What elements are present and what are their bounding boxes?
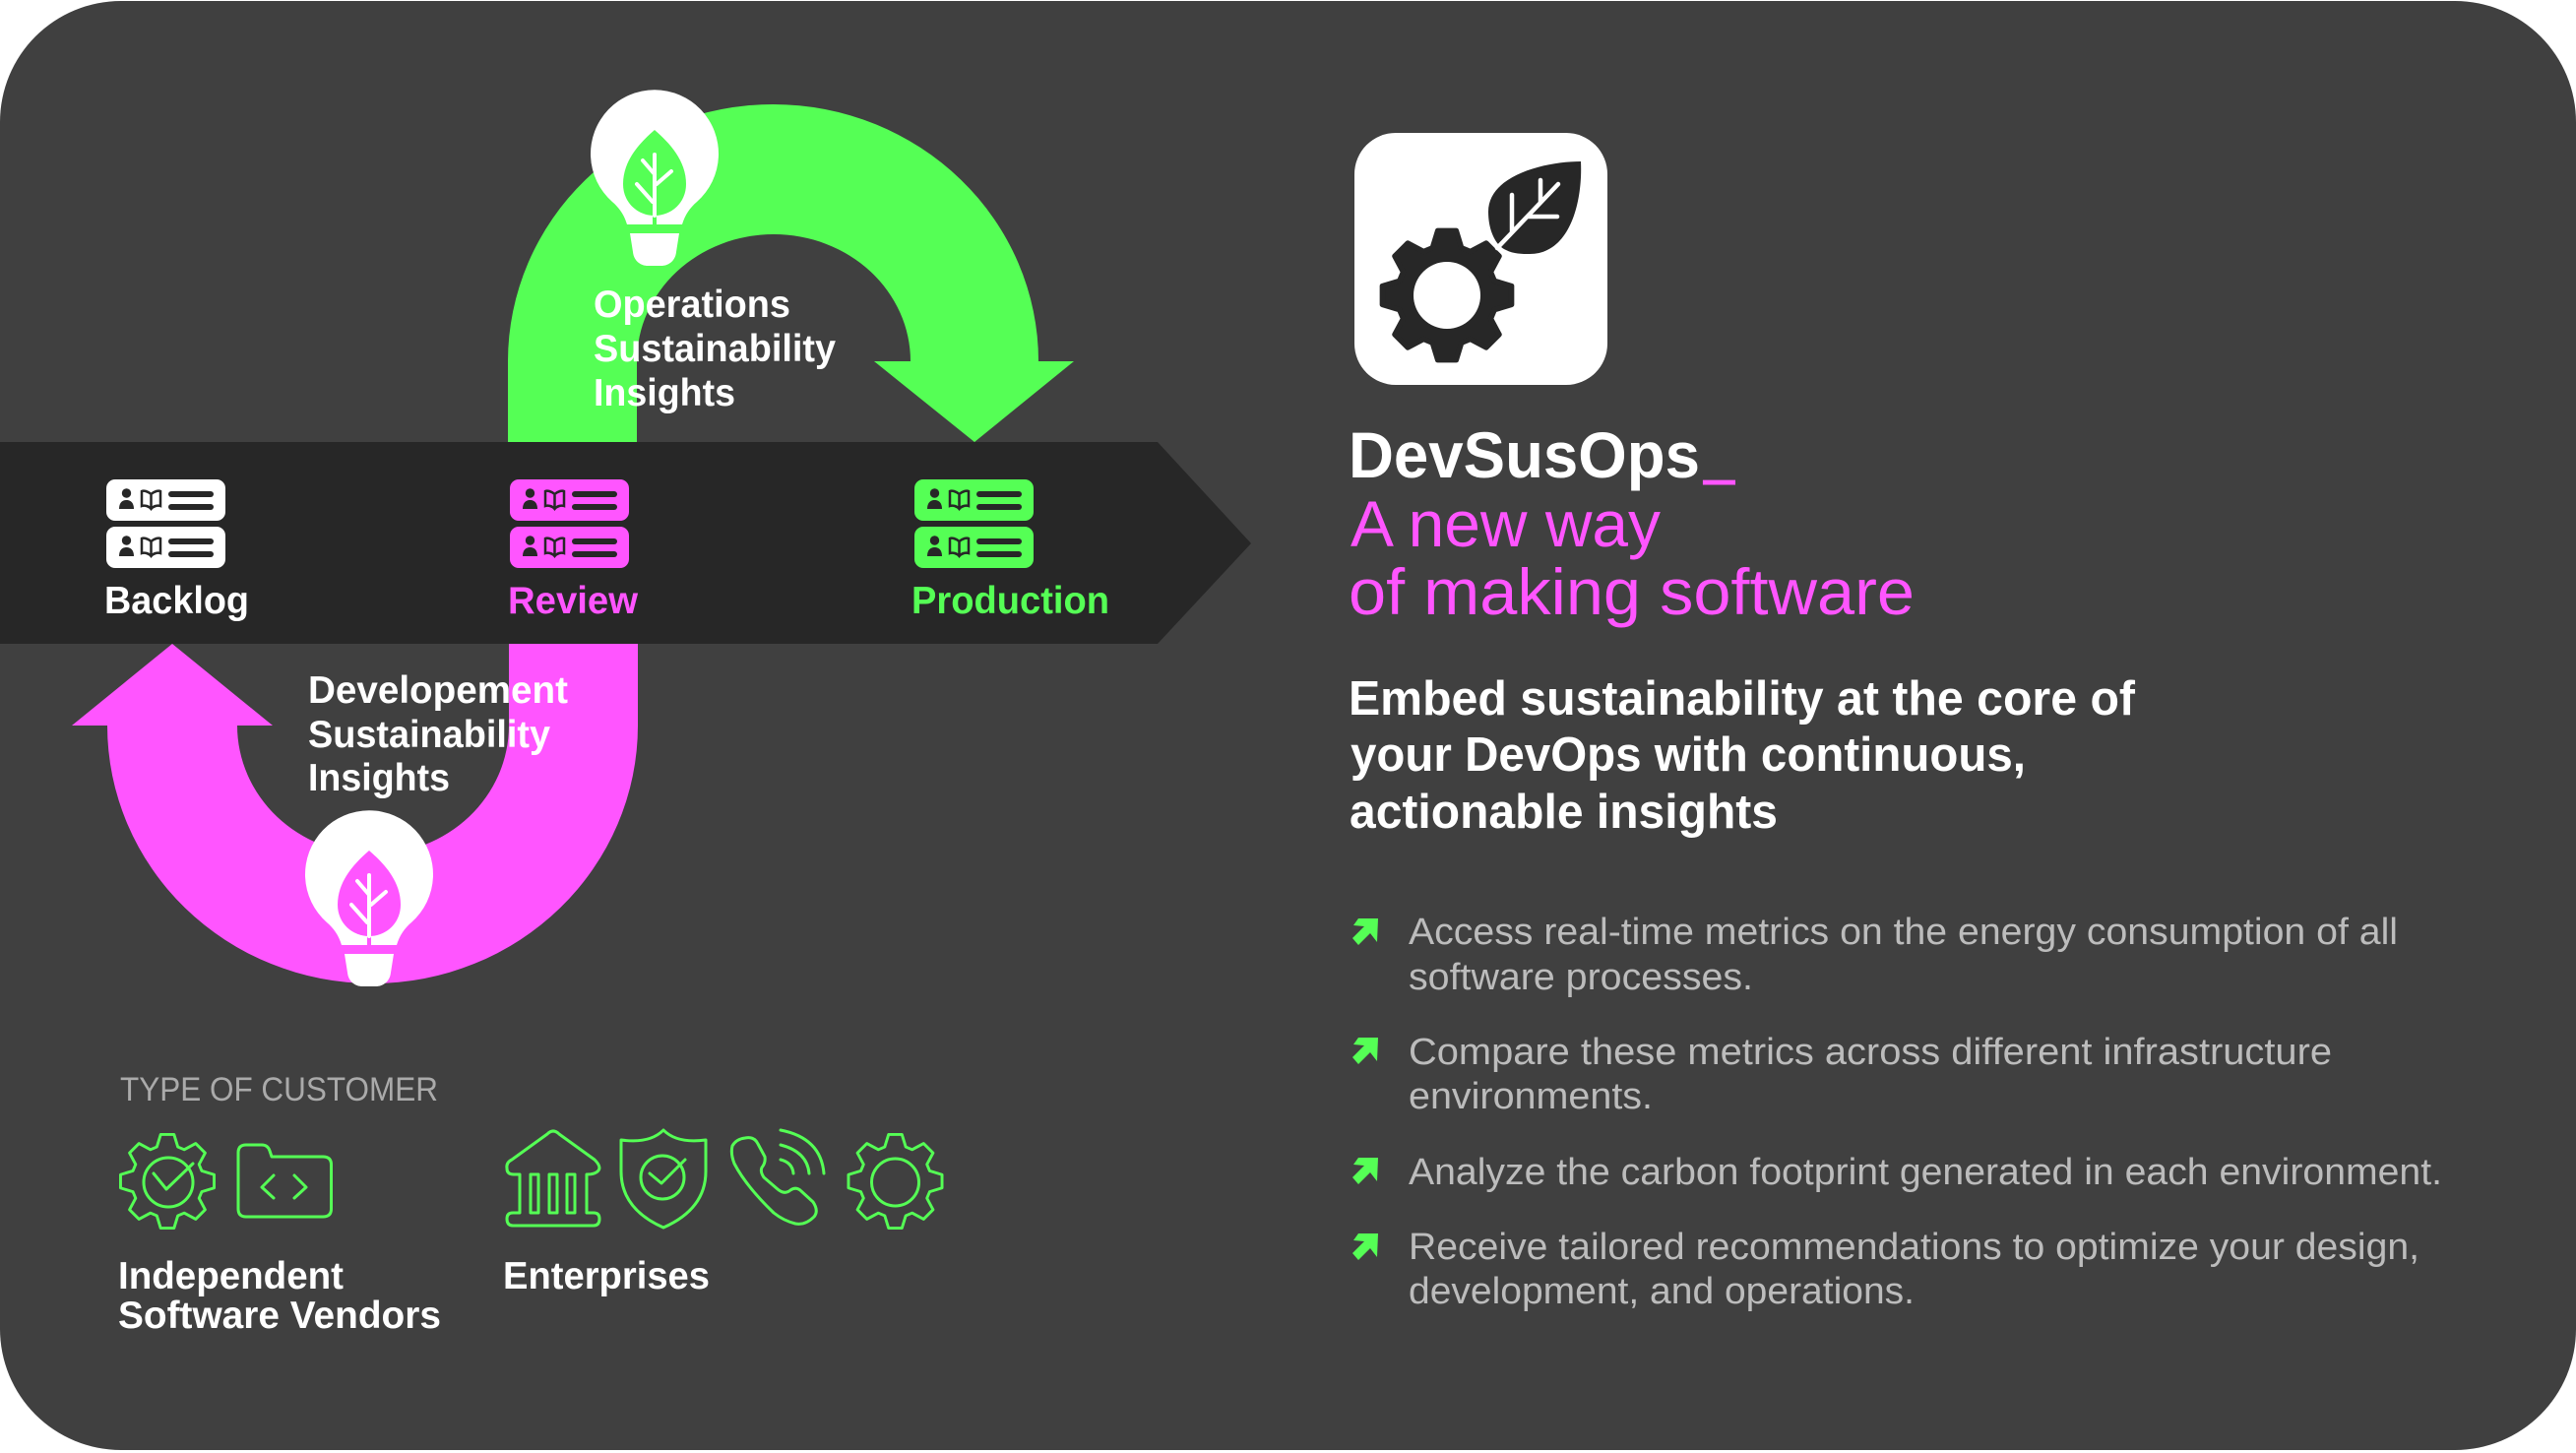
bullet: compare metrics: environments. bbox=[1409, 1076, 1653, 1117]
bullet: tailored recommendations: development, and operations. bbox=[1409, 1271, 1915, 1312]
heading: type of customer: TYPE OF CUSTOMER bbox=[120, 1071, 438, 1108]
bullet: carbon footprint: Analyze the carbon footprint generated in each environment. bbox=[1409, 1152, 2442, 1193]
bullet: tailored recommendations bbox=[1352, 1227, 2419, 1312]
stage: review: Review bbox=[508, 580, 639, 622]
subtitle: a new way of making software bbox=[1349, 487, 1915, 628]
bullet: tailored recommendations: Receive tailored recommendations to optimize your design, bbox=[1409, 1227, 2419, 1268]
icon: shield with check bbox=[621, 1130, 706, 1228]
bullet: real-time metrics: Access real-time metrics on the energy consumption of all bbox=[1409, 912, 2398, 953]
icon: bank bbox=[507, 1131, 599, 1226]
stage: production bbox=[911, 479, 1109, 622]
title: DevSusOps: _ bbox=[1704, 433, 1734, 488]
text: value proposition: your DevOps with continuous, bbox=[1351, 728, 2026, 782]
stage: backlog bbox=[104, 479, 249, 622]
stage: review bbox=[508, 479, 639, 622]
text: development sustainability insights: Insights bbox=[308, 757, 450, 799]
text: value proposition: actionable insights bbox=[1350, 786, 1778, 839]
stage: backlog: Backlog bbox=[104, 580, 249, 622]
arrow: magenta development loop bbox=[72, 640, 638, 983]
bullet: real-time metrics: software processes. bbox=[1409, 957, 1753, 998]
text: development sustainability insights bbox=[308, 669, 568, 799]
icon: phone with signal bbox=[731, 1130, 824, 1224]
text: operations sustainability insights: Sustainability bbox=[594, 328, 836, 370]
text: operations sustainability insights: Insights bbox=[594, 372, 735, 414]
subtitle: a new way of making software: of making software bbox=[1349, 555, 1915, 628]
bullet: compare metrics: Compare these metrics across different infrastructure bbox=[1409, 1032, 2332, 1073]
label: independent software vendors bbox=[118, 1255, 441, 1337]
arrow: green operations loop bbox=[508, 104, 1074, 448]
icon: magenta lightbulb with leaf bbox=[305, 810, 433, 986]
label: enterprises: Enterprises bbox=[503, 1255, 710, 1297]
stage: production: Production bbox=[911, 580, 1109, 622]
text: operations sustainability insights: Operations bbox=[594, 284, 790, 326]
icon: green lightbulb with leaf bbox=[591, 90, 719, 266]
title: DevSusOps: DevSusOps bbox=[1349, 418, 1700, 491]
icon: code folder bbox=[238, 1145, 331, 1217]
icon: gear with check bbox=[120, 1134, 215, 1229]
pipeline arrow band bbox=[0, 442, 1251, 644]
text: development sustainability insights: Sustainability bbox=[308, 714, 550, 756]
text: value proposition bbox=[1349, 672, 2136, 839]
icon: gear bbox=[848, 1134, 942, 1229]
label: independent software vendors: Software Vendors bbox=[118, 1295, 441, 1337]
label: independent software vendors: Independent bbox=[118, 1255, 344, 1297]
logo: gear and leaf bbox=[1354, 133, 1607, 385]
text: operations sustainability insights bbox=[594, 284, 836, 414]
bullet: real-time metrics bbox=[1352, 912, 2398, 998]
subtitle: a new way of making software: A new way bbox=[1351, 487, 1661, 560]
bullet: compare metrics bbox=[1352, 1032, 2332, 1117]
text: development sustainability insights: Developement bbox=[308, 669, 568, 712]
text: value proposition: Embed sustainability at the core of bbox=[1349, 672, 2136, 726]
